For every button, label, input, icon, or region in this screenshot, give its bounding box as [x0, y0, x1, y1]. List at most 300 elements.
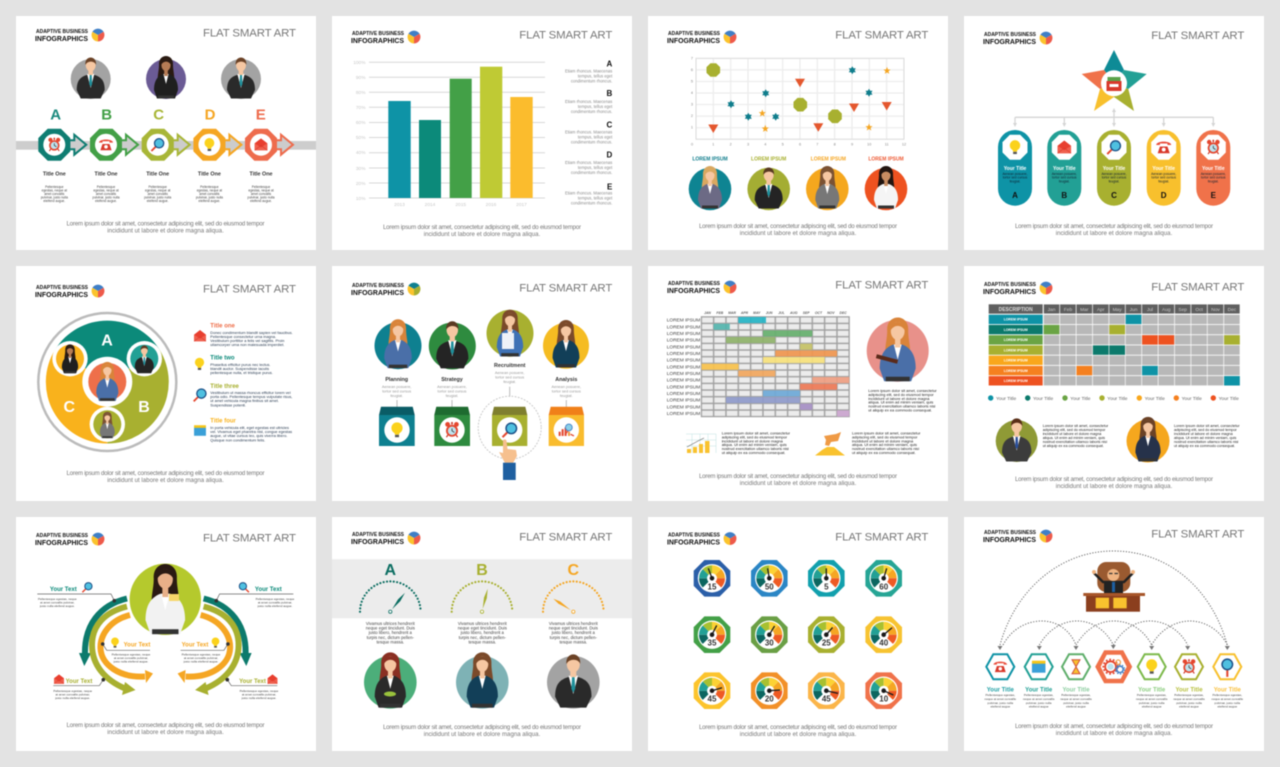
callout orange left: [111, 637, 151, 664]
hexagon node 5: pulvinar, justo nulla: [1139, 701, 1165, 705]
person with text: adipiscing elit, sed do eiusmod tempor: [868, 393, 934, 397]
footer text: incididunt ut labore et dolore magna aliqua.: [424, 731, 541, 738]
person C: [547, 654, 600, 709]
pill A: Aenean posuere,: [1002, 172, 1028, 176]
column analysis: tortor sed cursus: [552, 388, 581, 394]
step descriptions: eleifend augue.: [250, 199, 272, 203]
step descriptions: amet convallis: [148, 192, 168, 196]
bar chart: 2013: [394, 202, 405, 208]
horse coins with text: aliqua. Ut enim ad minim veniam, quis: [852, 443, 917, 447]
list item one: [194, 324, 293, 347]
callout olive right: Your Text: [239, 679, 266, 685]
gauge 20: 20: [765, 695, 774, 704]
list item three: Title three: [210, 384, 240, 390]
persons with labels: LOREM IPSUM: [692, 156, 728, 162]
person B: [456, 652, 509, 709]
gantt chart: LOREM IPSUM: [667, 398, 700, 404]
column planning: Planning: [385, 377, 408, 383]
legend A-E: Etiam rhoncus. Maecenas: [565, 130, 612, 134]
column planning: tortor sed cursus: [382, 388, 411, 394]
grey band: [332, 559, 632, 618]
gantt chart: LOREM IPSUM: [667, 358, 700, 364]
hexagon node 6: pulvinar, justo nulla: [1176, 701, 1202, 705]
person with text right: aliqua. Ut enim ad minim veniam, quis: [1174, 436, 1236, 440]
pill B: [1047, 130, 1081, 206]
gauge A: A: [385, 562, 397, 579]
bar chart: 90%: [356, 75, 366, 81]
list item one: Vestibulum porttitor a felis vel sagittis. Proin: [210, 339, 284, 343]
hexagon node 5: eleifend augue: [1142, 705, 1162, 709]
gauge 50: 50: [765, 582, 774, 591]
title: FLAT SMART ART: [835, 30, 928, 42]
legend: Your Title: [1219, 396, 1239, 402]
description C: Vivamus ultrices hendrerit: [549, 621, 599, 626]
description C: neque eget tincidunt. Duis: [549, 626, 598, 630]
callout orange left: justo nulla eleifend augue.: [113, 660, 149, 664]
footer text: incididunt ut labore et dolore magna aliqua.: [740, 230, 857, 237]
pill D: [1147, 130, 1181, 206]
legend A-E: tempus, tellus eget: [578, 74, 613, 78]
bar chart: 80%: [356, 90, 366, 96]
circle diagram: B: [138, 399, 150, 416]
logo: ADAPTIVE BUSINESS: [36, 285, 88, 291]
person with text left: ut aliquip ex ea commodo consequat.: [1043, 444, 1104, 448]
list item three: ut amet vehicula magna finibus sit amet.: [210, 399, 279, 403]
gauge B: B: [476, 562, 488, 579]
bar chart: 100%: [353, 60, 366, 66]
footer text: incididunt ut labore et dolore magna aliqua.: [740, 480, 857, 487]
person with text right: ut aliquip ex ea commodo consequat.: [1174, 444, 1235, 448]
callout olive right: at amet convallis pulvinar,: [242, 693, 276, 697]
persons with labels: LOREM IPSUM: [751, 156, 786, 162]
step descriptions: [41, 185, 275, 203]
persons with labels: LOREM IPSUM: [868, 156, 904, 162]
hexagon node 7: eleifend augue: [1217, 705, 1237, 709]
title: FLAT SMART ART: [1151, 30, 1244, 42]
letters: C: [153, 106, 164, 124]
bar chart: 2015: [455, 202, 466, 208]
bar chart: 2016: [486, 202, 497, 208]
list item three: [194, 384, 292, 407]
legend A-E: tempus, tellus eget: [578, 196, 613, 200]
title: FLAT SMART ART: [519, 282, 612, 294]
scatter chart: 6: [799, 142, 801, 146]
hexagon node 6: Pellentesque egestas,: [1174, 693, 1204, 697]
scatter chart: 7: [816, 142, 818, 146]
gantt chart: LOREM IPSUM: [667, 411, 700, 417]
growth chart with text: ut aliquip ex ea commodo consequat.: [722, 451, 785, 455]
gantt chart: LOREM IPSUM: [667, 391, 700, 397]
callout orange right: Pellentesque egestas, neque: [182, 652, 221, 656]
column strategy: Strategy: [441, 377, 463, 383]
icon: pointing hand: [499, 439, 517, 480]
bar chart: 30%: [356, 166, 366, 172]
logo: ADAPTIVE BUSINESS: [984, 530, 1036, 536]
logo: INFOGRAPHICS: [983, 287, 1036, 296]
gantt chart: OCT: [815, 311, 823, 315]
panel: gauge icons grid: [648, 517, 948, 751]
step descriptions: egestas, neque at: [145, 188, 170, 192]
description C: justo libero, hendrerit a: [551, 630, 596, 635]
gauge 15: 15: [708, 582, 717, 591]
person with text left: nostrud exercitation ullamco laboris nisi: [1043, 440, 1107, 444]
scatter chart: 0: [691, 142, 693, 146]
gantt chart: FEB: [716, 311, 724, 315]
schedule table: Jul: [1147, 307, 1153, 313]
step descriptions: Pellentesque: [200, 185, 219, 189]
gauge 45: [694, 672, 730, 709]
hexagon node 2: [1023, 654, 1055, 709]
gauge 45 second: 45: [822, 695, 831, 704]
legend A-E: D: [607, 150, 613, 160]
logo: INFOGRAPHICS: [35, 34, 88, 43]
person with text right: [1126, 417, 1240, 462]
list item two: [195, 356, 273, 375]
horse coins with text: nostrud exercitation ullamco laboris nisi: [852, 447, 919, 451]
column planning: [374, 319, 422, 446]
hexagon node 7: Your Title: [1214, 688, 1242, 694]
schedule table: Mar: [1080, 307, 1089, 313]
panel: bar chart: [332, 16, 632, 250]
description A: tesque massa.: [376, 640, 404, 645]
list item four: Quisque non condimentum felis.: [210, 438, 265, 442]
pill D: Aenean posuere,: [1151, 172, 1176, 176]
hexagon node 7: Pellentesque egestas,: [1213, 693, 1242, 697]
logo: INFOGRAPHICS: [35, 290, 88, 299]
scatter chart: 2: [730, 142, 732, 146]
pill C: tortor sed cursus: [1102, 176, 1127, 180]
logo: ADAPTIVE BUSINESS: [668, 31, 720, 37]
pill C: Aenean posuere,: [1101, 172, 1127, 176]
callout olive left: Pellentesque egestas, neque: [53, 689, 92, 693]
schedule table: LOREM IPSUM: [1004, 348, 1028, 352]
pill A: A: [1012, 191, 1018, 200]
footer text: Lorem ipsum dolor sit amet, consectetur adipiscing elit, sed do eiusmod tempor: [383, 224, 581, 231]
gauge C: C: [568, 562, 580, 579]
column analysis: [543, 320, 589, 446]
column analysis: Analysis: [555, 377, 577, 383]
logo: ADAPTIVE BUSINESS: [668, 281, 720, 287]
scatter chart: [691, 56, 906, 146]
hexagon node 1: pulvinar, justo nulla: [988, 701, 1013, 705]
logo: [667, 31, 736, 45]
gauge 35: [694, 616, 730, 653]
hexagon node 3: [1060, 654, 1092, 709]
callout olive left: Your Text: [66, 679, 92, 685]
logo: INFOGRAPHICS: [351, 537, 404, 546]
dashed arcs: [1000, 551, 1227, 645]
title: FLAT SMART ART: [519, 532, 612, 544]
scatter chart: 4: [691, 91, 693, 95]
step descriptions: pulvinar, justo nulla: [41, 196, 68, 200]
footer text: Lorem ipsum dolor sit amet, consectetur adipiscing elit, sed do eiusmod tempor: [699, 473, 897, 480]
person with text right: nostrud exercitation ullamco laboris nisi: [1174, 440, 1239, 444]
description A: justo libero, hendrerit a: [368, 630, 413, 635]
schedule table: Aug: [1162, 307, 1171, 313]
scatter chart: 4: [764, 142, 766, 146]
logo: ADAPTIVE BUSINESS: [668, 532, 720, 538]
logo: [35, 533, 104, 547]
hexagon node 3: pulvinar, justo nulla: [1063, 701, 1089, 705]
gantt chart: LOREM IPSUM: [667, 324, 700, 330]
letters: [50, 106, 266, 124]
bar chart: 60%: [356, 120, 366, 126]
step descriptions: pulvinar, justo nulla: [92, 196, 120, 200]
callout orange left: Pellentesque egestas, neque: [112, 652, 151, 656]
scatter chart: 8: [834, 142, 836, 146]
person with text left: aliqua. Ut enim ad minim veniam, quis: [1043, 436, 1105, 440]
legend A-E: tempus, tellus eget: [578, 165, 613, 170]
hexagon node 2: neque at amet convallis: [1023, 697, 1055, 701]
pill E: feugiat.: [1208, 179, 1219, 183]
gauge 10: 10: [879, 695, 889, 704]
list item four: vel. Vivamus eget pharetra nisl, congue egestas: [210, 430, 292, 434]
list item one: ullamcorper urna non malesuada imperdiet.: [210, 343, 284, 347]
panel: star org chart: [964, 16, 1264, 250]
logo: INFOGRAPHICS: [351, 36, 404, 45]
scatter chart: 10: [867, 142, 871, 146]
title: FLAT SMART ART: [1151, 528, 1244, 540]
hexagon node 1: neque at amet convallis: [985, 697, 1017, 701]
column strategy: [429, 321, 476, 446]
step captions: Title One: [250, 172, 272, 178]
hexagon node 5: [1136, 654, 1168, 709]
footer text: incididunt ut labore et dolore magna aliqua.: [1056, 730, 1173, 737]
central woman: [130, 564, 201, 635]
schedule table: Oct: [1195, 307, 1203, 313]
logo: [351, 532, 420, 546]
pill D: Your Title: [1152, 166, 1175, 172]
footer text: Lorem ipsum dolor sit amet, consectetur adipiscing elit, sed do eiusmod tempor: [383, 724, 581, 731]
letters: A: [50, 106, 61, 124]
scatter chart: 9: [851, 142, 853, 146]
footer text: Lorem ipsum dolor sit amet, consectetur adipiscing elit, sed do eiusmod tempor: [1015, 476, 1213, 483]
step descriptions: pulvinar, justo nulla: [144, 196, 171, 200]
pill E: Aenean posuere,: [1201, 172, 1226, 176]
callout orange right: Your Text: [182, 642, 208, 648]
footer text: incididunt ut labore et dolore magna aliqua.: [1056, 483, 1173, 490]
pill C: Your Title: [1103, 166, 1126, 172]
bar chart: [353, 60, 545, 208]
scatter chart: 7: [691, 56, 693, 60]
legend: Your Title: [1033, 396, 1053, 402]
logo: INFOGRAPHICS: [35, 538, 88, 547]
gauge 45 second: [808, 672, 845, 709]
legend A-E: condimentum rhoncus.: [571, 170, 612, 175]
person with text: Lorem ipsum dolor sit amet, consectetur: [868, 389, 937, 393]
pill E: tortor sed cursus: [1201, 176, 1226, 180]
gantt chart: JUN: [766, 311, 773, 315]
title: FLAT SMART ART: [203, 284, 296, 296]
pill B: Aenean posuere,: [1052, 172, 1077, 176]
person with text: incididunt ut labore et dolore magna: [868, 397, 930, 401]
gauge 40: 40: [879, 639, 889, 648]
schedule table: Jun: [1130, 307, 1138, 313]
gantt chart: LOREM IPSUM: [667, 331, 700, 337]
footer text: Lorem ipsum dolor sit amet, consectetur adipiscing elit, sed do eiusmod tempor: [699, 724, 897, 731]
step captions: Title One: [198, 172, 221, 178]
column strategy: Aenean posuere,: [437, 384, 467, 389]
list item two: blandit auctor. Suspendisse iaculis: [210, 367, 269, 371]
hexagon node 2: eleifend augue: [1029, 705, 1049, 709]
step descriptions: eleifend augue.: [95, 199, 117, 203]
callout orange left: Your Text: [124, 642, 150, 648]
pill A: Your Title: [1004, 166, 1027, 172]
arrowheads: [998, 645, 1230, 650]
pill A: tortor sed cursus: [1003, 176, 1028, 180]
step captions: [43, 172, 272, 178]
step A octagon arrow: [38, 129, 86, 161]
description B: neque eget tincidunt. Duis: [458, 626, 507, 630]
schedule table: Apr: [1097, 307, 1105, 313]
legend A-E: condimentum rhoncus.: [571, 200, 612, 206]
step D octagon arrow: [193, 129, 241, 161]
logo: [983, 32, 1052, 46]
list item two: Phasellus efficitur purus nec lectus.: [210, 363, 270, 367]
gauge 30: 30: [765, 639, 774, 648]
schedule table: Nov: [1211, 307, 1220, 313]
column recruitment: Recruitment: [494, 363, 526, 369]
panel: gantt chart: [648, 266, 948, 501]
legend A-E: Etiam rhoncus. Maecenas: [565, 190, 612, 196]
bar chart: 50%: [356, 135, 366, 141]
gantt chart: SEP: [803, 311, 810, 315]
growth chart with text: adipiscing elit, sed do eiusmod tempor: [722, 435, 788, 439]
hexagon node 1: eleifend augue: [990, 705, 1010, 709]
column recruitment: Aenean posuere,: [495, 370, 525, 375]
boss at desk: [1083, 562, 1145, 612]
star: [1082, 50, 1147, 111]
gantt chart: NOV: [827, 311, 835, 315]
hexagon node 6: [1173, 654, 1205, 709]
step descriptions: pulvinar, justo nulla: [196, 196, 223, 200]
panel: scatter chart: [648, 16, 948, 250]
pill A: [998, 130, 1032, 206]
gantt chart: LOREM IPSUM: [667, 338, 700, 344]
step descriptions: eleifend augue.: [43, 199, 65, 203]
list item three: porta odio. Pellentesque tempus vulputate risus,: [210, 395, 292, 399]
pill E: Your Title: [1202, 166, 1225, 172]
central hexagon: [1095, 650, 1132, 683]
logo: [35, 285, 104, 299]
column planning: Aenean posuere,: [382, 384, 412, 389]
logo: [983, 282, 1052, 296]
logo: INFOGRAPHICS: [667, 538, 720, 546]
list item one: Title one: [210, 324, 236, 330]
step descriptions: egestas, neque at: [197, 188, 222, 192]
description C: turpis nec, dictum pellen-: [550, 635, 598, 640]
pill D: tortor sed cursus: [1151, 176, 1176, 180]
step E octagon arrow: [245, 129, 293, 161]
step descriptions: amet convallis: [96, 192, 117, 196]
gantt chart: APR: [740, 311, 749, 315]
logo: [667, 532, 736, 546]
gauge 30: [751, 616, 788, 653]
gantt chart: AUG: [789, 311, 798, 315]
persons with labels: [689, 156, 907, 210]
logo: [983, 530, 1052, 544]
person with text left: Lorem ipsum dolor sit amet, consectetur: [1043, 424, 1109, 428]
scatter chart: 3: [691, 102, 693, 106]
hexagon node 3: Your Title: [1062, 688, 1090, 694]
hexagon node 3: neque at amet convallis: [1060, 697, 1092, 701]
logo: [351, 31, 420, 45]
scatter chart: 12: [902, 142, 906, 146]
letters: E: [256, 106, 266, 124]
title: FLAT SMART ART: [203, 532, 296, 544]
list item three: Suspendisse potenti.: [210, 403, 246, 407]
schedule table: LOREM IPSUM: [1004, 369, 1028, 373]
footer text: Lorem ipsum dolor sit amet, consectetur adipiscing elit, sed do eiusmod tempor: [1015, 723, 1213, 730]
hexagon node 2: Your Title: [1025, 688, 1053, 694]
callout teal right: at amet convallis pulvinar,: [258, 601, 292, 605]
list item one: Pellentesque consectetur urna magna.: [210, 335, 276, 339]
gauge 45: 45: [708, 695, 717, 704]
footer text: incididunt ut labore et dolore magna aliqua.: [107, 729, 224, 736]
description B: turpis nec, dictum pellen-: [459, 635, 507, 640]
legend A-E: condimentum rhoncus.: [571, 109, 612, 114]
bar chart: 2017: [516, 202, 527, 208]
callout teal right: [239, 583, 295, 608]
step B octagon arrow: [90, 129, 138, 161]
callout teal right: Pellentesque egestas, neque: [256, 597, 295, 601]
pill B: feugiat.: [1059, 179, 1070, 183]
footer text: Lorem ipsum dolor sit amet, consectetur adipiscing elit, sed do eiusmod tempor: [699, 223, 897, 230]
gantt chart: LOREM IPSUM: [667, 404, 700, 410]
person with text: nostrud exercitation ullamco laboris nisi: [868, 405, 936, 409]
gauge 10: [865, 672, 902, 709]
title: FLAT SMART ART: [519, 30, 612, 42]
gauge 50: [751, 560, 788, 597]
gantt chart: MAR: [728, 311, 737, 315]
hexagon node 3: Pellentesque egestas,: [1061, 693, 1091, 697]
step descriptions: amet convallis: [251, 192, 272, 196]
list item four: Title four: [210, 418, 237, 424]
legend A-E: B: [607, 89, 613, 98]
gauge 20: [751, 672, 788, 709]
schedule table: LOREM IPSUM: [1004, 318, 1028, 322]
step descriptions: egestas, neque at: [42, 188, 67, 192]
pill A: feugiat.: [1010, 179, 1020, 183]
growth chart with text: aliqua. Ut enim ad minim veniam, quis: [722, 443, 787, 447]
bar chart: 20%: [356, 181, 366, 187]
person A: [364, 652, 417, 709]
callout teal right: justo nulla eleifend augue.: [257, 604, 293, 608]
step descriptions: egestas, neque at: [248, 188, 274, 192]
panel: circular team diagram: [16, 266, 316, 501]
horse coins with text: [815, 432, 921, 456]
pill D: feugiat.: [1158, 179, 1169, 183]
logo: INFOGRAPHICS: [667, 36, 720, 45]
description B: Vivamus ultrices hendrerit: [458, 621, 508, 626]
gantt chart: LOREM IPSUM: [667, 384, 700, 390]
schedule table: LOREM IPSUM: [1004, 379, 1028, 383]
circle diagram: A: [101, 332, 113, 350]
hexagon node 2: pulvinar, justo nulla: [1026, 701, 1052, 705]
legend A-E: condimentum rhoncus.: [571, 78, 612, 84]
legend A-E: tempus, tellus eget: [578, 104, 613, 109]
hexagon node 5: Pellentesque egestas,: [1137, 693, 1167, 697]
title: FLAT SMART ART: [835, 532, 928, 544]
legend A-E: A: [607, 60, 613, 68]
hexagon node 7: [1212, 654, 1244, 709]
step captions: Title One: [146, 172, 169, 178]
person with text: aliqua. Ut enim ad minim veniam, quis: [868, 401, 933, 405]
callout olive right: [239, 674, 279, 700]
hexagon node 1: [985, 654, 1017, 709]
list item four: [194, 418, 292, 442]
step captions: Title One: [43, 172, 66, 178]
